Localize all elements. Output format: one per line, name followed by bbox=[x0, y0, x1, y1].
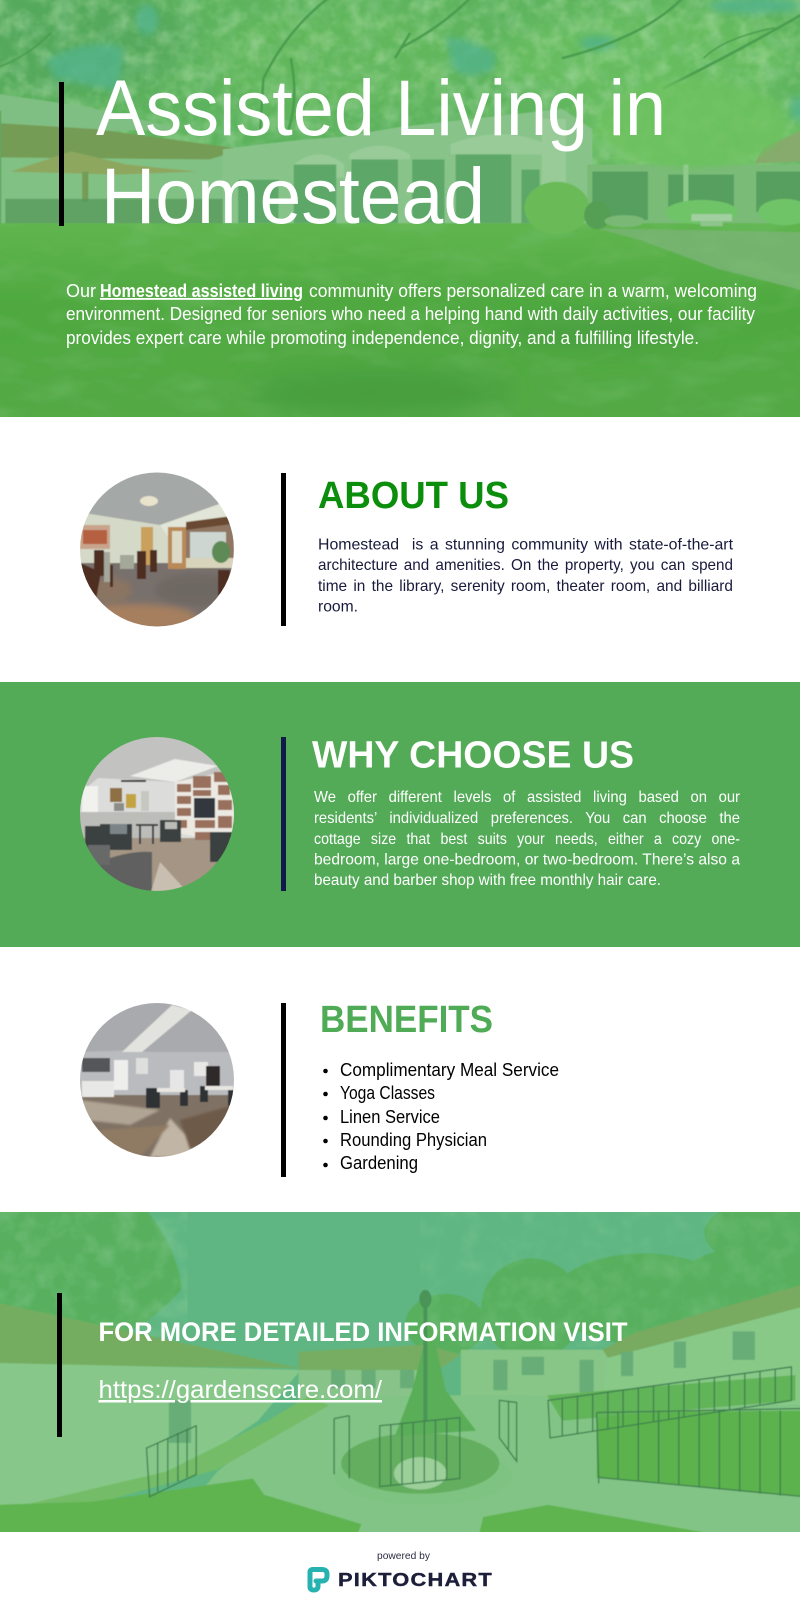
intro paragraph bbox=[66, 280, 757, 348]
panel: why choose us bbox=[0, 682, 800, 947]
intro paragraph: environment. Designed for seniors who need a helping hand with daily activities, our facility bbox=[66, 303, 756, 324]
photo: dining lounge bbox=[80, 472, 234, 626]
benefits list: Linen Service bbox=[340, 1107, 440, 1127]
why text: cottage size that best suits your needs, either a cozy one- bbox=[314, 831, 740, 848]
photo: library lounge bbox=[78, 735, 236, 895]
intro paragraph: community offers personalized care in a warm, welcoming bbox=[309, 280, 757, 301]
accent bar: about bbox=[281, 473, 286, 626]
panel: about us bbox=[73, 470, 734, 632]
piktochart wordmark: PIKTOCHART bbox=[338, 1570, 493, 1590]
heading: benefits: BENEFITS bbox=[320, 999, 493, 1041]
title: Homestead bbox=[101, 151, 485, 240]
ground bbox=[167, 1395, 800, 1534]
footer background photo bbox=[0, 1199, 800, 1534]
intro paragraph: Homestead assisted living bbox=[100, 280, 303, 301]
benefits list: Rounding Physician bbox=[340, 1130, 487, 1150]
accent bar: benefits bbox=[281, 1003, 286, 1177]
building bbox=[0, 94, 182, 134]
why text: bedroom, large one-bedroom, or two-bedroom. There’s also a bbox=[314, 852, 740, 868]
panel: hero bbox=[0, 0, 800, 420]
accent bar: hero bbox=[59, 82, 64, 226]
intro paragraph: Our bbox=[66, 280, 96, 301]
about text: Homestead is a stunning community with state-of-the-art bbox=[318, 536, 734, 554]
accent bar: why bbox=[281, 737, 286, 891]
why text: residents’ individualized preferences. You can choose the bbox=[314, 810, 740, 827]
panel: benefits bbox=[78, 999, 559, 1177]
about text: room. bbox=[318, 598, 358, 616]
cta heading: FOR MORE DETAILED INFORMATION VISIT bbox=[98, 1317, 628, 1347]
hero background photo bbox=[0, 0, 800, 420]
benefits list: Yoga Classes bbox=[340, 1083, 435, 1103]
buildings bbox=[0, 1302, 299, 1368]
shrubs bbox=[524, 182, 589, 234]
lawn bbox=[0, 223, 800, 420]
intro paragraph: provides expert care while promoting independence, dignity, and a fulfilling lifestyle. bbox=[66, 327, 699, 348]
why text bbox=[314, 789, 740, 889]
panel: call to action bbox=[0, 1199, 800, 1534]
accent bar: call to action bbox=[57, 1293, 62, 1437]
benefits list: Complimentary Meal Service bbox=[340, 1060, 559, 1080]
benefits list: Gardening bbox=[340, 1153, 418, 1173]
why text: beauty and barber shop with free monthly hair care. bbox=[314, 872, 661, 889]
fences bbox=[146, 1367, 800, 1497]
title bbox=[96, 63, 666, 240]
panel: powered by bbox=[310, 1550, 493, 1590]
about text: time in the library, serenity room, theater room, and billiard bbox=[318, 578, 733, 595]
heading: why choose us: WHY CHOOSE US bbox=[312, 734, 634, 776]
about text bbox=[318, 536, 734, 616]
photo: community room bbox=[78, 1001, 236, 1159]
cta link: https://gardenscare.com/ bbox=[98, 1376, 382, 1404]
icon: piktochart logo bbox=[310, 1570, 327, 1590]
title: Assisted Living in bbox=[96, 63, 666, 152]
why text: We offer different levels of assisted living based on our bbox=[314, 789, 740, 806]
heading: about us: ABOUT US bbox=[318, 475, 509, 517]
powered by label: powered by bbox=[377, 1550, 431, 1562]
about text: architecture and amenities. On the property, you can spend bbox=[318, 557, 733, 574]
benefits list bbox=[323, 1060, 559, 1173]
